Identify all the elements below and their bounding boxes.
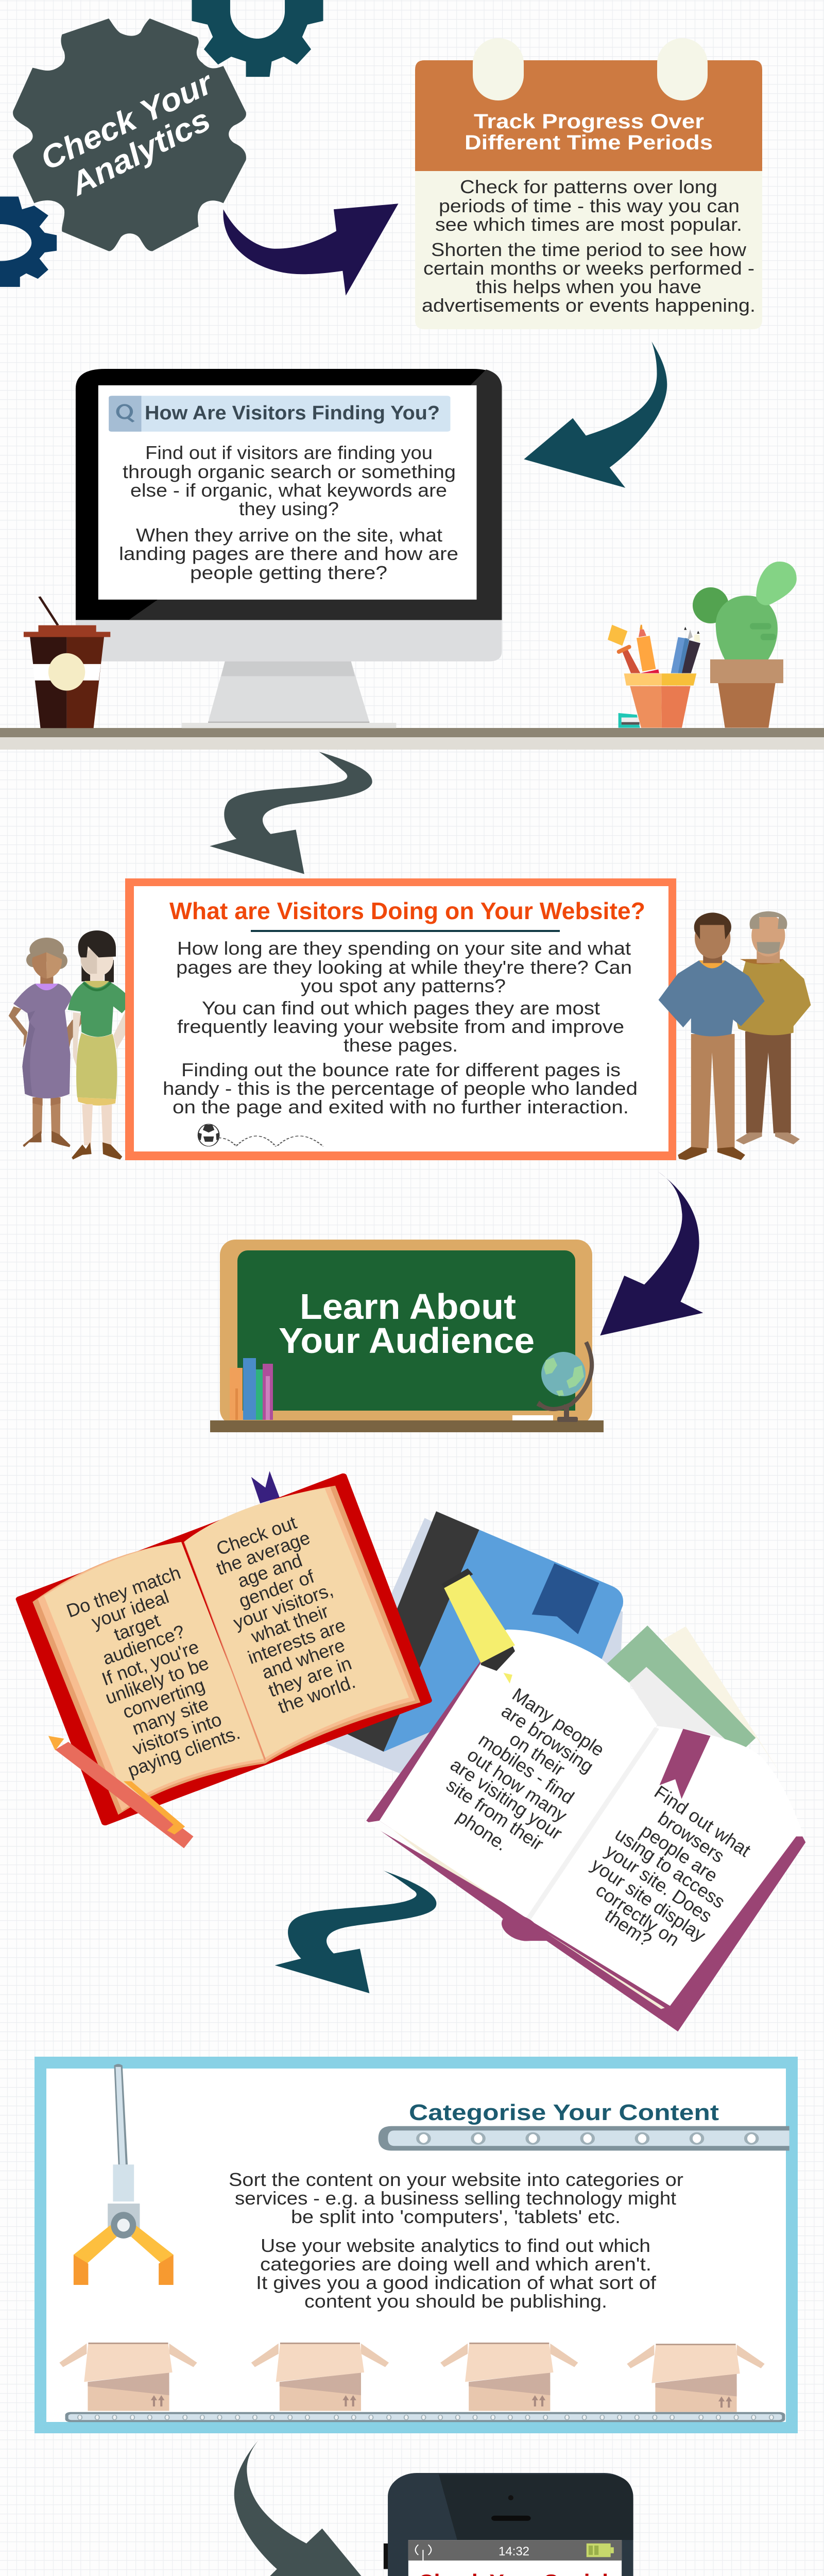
arrow: navy to calendar xyxy=(223,204,398,296)
text block: monitor body: through organic search or something xyxy=(123,461,456,482)
arrow: teal S to categorise panel xyxy=(275,1871,436,1993)
text block: visitors body: How long are they spending on your site and what xyxy=(177,938,631,959)
title gear: Check Your Analytics xyxy=(13,19,246,251)
text block: categorise body: Use your website analytics to find out which xyxy=(261,2235,650,2256)
text block: red book right page: age and xyxy=(235,1549,305,1592)
text block: categorise body: services - e.g. a business selling technology might xyxy=(235,2188,676,2209)
text block: red book left page: If not, you're xyxy=(99,1636,202,1690)
red book xyxy=(20,1471,428,1823)
text block: red book right page: your visitors, xyxy=(231,1579,336,1634)
panel: phone, social media analytics xyxy=(384,2473,633,2576)
text block: purple book left page: Many people xyxy=(508,1684,608,1760)
text block: purple book left page xyxy=(442,1684,608,1855)
text block: categorise body: content you should be publishing. xyxy=(304,2291,607,2312)
text block: visitors body: You can find out which pages they are most xyxy=(202,997,600,1019)
arrow: navy to chalkboard xyxy=(600,1172,703,1335)
heading: Check Your: Check Your xyxy=(35,64,219,177)
text block: purple book right page: them? xyxy=(601,1905,656,1951)
text block: red book right page: Check out xyxy=(214,1512,299,1560)
text block: purple book left page: mobiles - find xyxy=(475,1729,578,1808)
text block: red book left page: audience? xyxy=(100,1620,187,1669)
text block: purple book right page: people are xyxy=(637,1820,722,1886)
text block: red book left page: paying clients. xyxy=(125,1722,243,1781)
heading: categorise your content: Categorise Your Content xyxy=(409,2100,719,2125)
text block: calendar body: periods of time - this way you can xyxy=(439,195,740,216)
text block: monitor body: else - if organic, what keywords are xyxy=(130,480,447,501)
icon: pencil xyxy=(48,1736,194,1848)
status time: 14:32 xyxy=(499,2545,529,2558)
icon: pen pot xyxy=(608,625,700,728)
text block: visitors body: frequently leaving your website from and improve xyxy=(177,1016,624,1037)
panel: visitors doing on website xyxy=(125,878,676,1160)
text block: visitors body: pages are they looking at while they're there? Can xyxy=(176,957,632,978)
panel: desk scene with monitor xyxy=(0,369,824,750)
heading: learn about your audience: Your Audience xyxy=(279,1320,535,1361)
text block: red book left page: Do they match xyxy=(64,1562,183,1622)
text block: purple book right page: correctly on xyxy=(592,1879,683,1951)
monitor xyxy=(76,369,502,728)
purple book xyxy=(366,1625,805,2031)
text block: red book right page: the world. xyxy=(275,1671,358,1718)
text block: purple book right page xyxy=(588,1781,754,1951)
text block: visitors body: on the page and exited with no further interaction. xyxy=(173,1096,629,1117)
text block: red book right page xyxy=(213,1512,358,1718)
text block: monitor body: people getting there? xyxy=(190,562,387,583)
arrow: slate S to visitors panel xyxy=(210,752,372,874)
text block: purple book right page: your site display xyxy=(588,1854,710,1946)
text block: calendar body: this helps when you have xyxy=(476,276,701,297)
heading: calendar title: Different Time Periods xyxy=(465,131,713,154)
woman in green xyxy=(68,930,136,1160)
text block: purple book right page: browsers xyxy=(654,1807,728,1867)
text block: monitor body xyxy=(119,442,458,583)
text block: monitor body: they using? xyxy=(239,498,339,519)
text block: calendar body: see which times are most popular. xyxy=(435,214,742,235)
text block: categorise body xyxy=(229,2169,683,2312)
text block: calendar body: certain months or weeks performed - xyxy=(423,258,754,279)
text block: purple book left page: are browsing xyxy=(497,1700,597,1777)
icon: bouncing ball xyxy=(198,1124,323,1146)
text block: red book right page: gender of xyxy=(236,1565,317,1612)
text block: visitors body xyxy=(163,938,638,1117)
icon: board books xyxy=(230,1358,273,1420)
text block: purple book left page: out how many xyxy=(464,1744,571,1826)
text block: red book left page: unlikely to be xyxy=(102,1652,212,1708)
text block: red book left page: your ideal xyxy=(89,1586,171,1633)
text block: categorise body: Sort the content on your website into categories or xyxy=(229,2169,683,2190)
text block: purple book left page: are visiting your xyxy=(447,1754,566,1844)
panel: categorise your content xyxy=(35,2057,798,2433)
text block: visitors body: Finding out the bounce rate for different pages is xyxy=(181,1059,621,1080)
text block: calendar body: Check for patterns over long xyxy=(460,176,717,197)
text block: visitors body: you spot any patterns? xyxy=(301,975,506,996)
text block: red book left page: visitors into xyxy=(130,1708,225,1759)
icon: globe xyxy=(538,1342,592,1422)
heading: calendar title: Track Progress Over xyxy=(474,110,704,133)
panel: calendar, track progress xyxy=(415,38,762,329)
text block: monitor body: When they arrive on the site, what xyxy=(136,524,442,546)
people: two men xyxy=(659,911,811,1160)
text block: purple book left page: on their xyxy=(506,1728,569,1780)
text block: red book left page: converting xyxy=(120,1674,208,1723)
text block: visitors body: handy - this is the percentage of people who landed xyxy=(163,1078,638,1099)
heading: Analytics: Analytics xyxy=(64,102,216,203)
text block: visitors body: these pages. xyxy=(344,1035,458,1056)
text block: red book right page: and where xyxy=(259,1634,348,1683)
top conveyor xyxy=(379,2126,789,2150)
text block: purple book right page: using to access xyxy=(611,1823,729,1912)
panel: open books xyxy=(20,1471,805,2031)
icon: teal gear top xyxy=(192,0,323,77)
heading: calendar title xyxy=(465,110,713,154)
heading: What are Visitors Doing on Your Website? xyxy=(169,897,645,924)
icon: magnifier xyxy=(118,405,133,422)
bottom conveyor xyxy=(65,2412,785,2422)
text block: categorise body: be split into 'computers', 'tablets' etc. xyxy=(291,2206,621,2227)
heading: learn about your audience xyxy=(279,1286,535,1361)
text block: red book right page: the average xyxy=(213,1527,313,1580)
arrow: teal to monitor xyxy=(524,342,667,488)
panel: chalkboard, learn about your audience xyxy=(210,1240,604,1432)
icon: blue gear left xyxy=(0,196,57,287)
heading: how are visitors finding you: How Are Visitors Finding You? xyxy=(145,402,440,424)
text block: purple book right page: your site. Does xyxy=(602,1840,716,1927)
text block: purple book right page: Find out what xyxy=(650,1781,754,1861)
people: two women xyxy=(9,938,82,1147)
icon: cactus xyxy=(693,562,797,728)
text block: red book left page: target xyxy=(111,1609,163,1645)
text block: categorise body: It gives you a good indication of what sort of xyxy=(256,2272,657,2293)
text block: monitor body: Find out if visitors are finding you xyxy=(145,442,433,463)
text block: categorise body: categories are doing well and which aren't. xyxy=(260,2253,651,2275)
shelf xyxy=(0,728,824,750)
heading: learn about your audience: Learn About xyxy=(300,1286,516,1327)
arrow: slate to phone xyxy=(234,2440,364,2576)
text block: red book right page: what their xyxy=(248,1600,331,1647)
icon: coffee cup xyxy=(24,597,110,728)
text block: monitor body: landing pages are there and how are xyxy=(119,543,458,564)
text block: purple book left page: phone. xyxy=(453,1806,511,1855)
text block: calendar body: advertisements or events happening. xyxy=(422,295,756,316)
text block: calendar body: Shorten the time period to see how xyxy=(431,239,747,260)
icon: robot claw xyxy=(74,2064,174,2285)
text block: red book left page xyxy=(64,1562,243,1781)
icon: highlighter xyxy=(441,1568,515,1684)
blue notebook xyxy=(326,1511,623,1775)
text block: red book right page: they are in xyxy=(266,1652,354,1701)
text block: red book right page: interests are xyxy=(245,1614,348,1668)
text block: red book left page: many site xyxy=(129,1692,211,1739)
text block: purple book left page: site from their xyxy=(442,1774,547,1855)
text block: calendar body xyxy=(422,176,756,316)
boxes row xyxy=(59,2343,765,2412)
